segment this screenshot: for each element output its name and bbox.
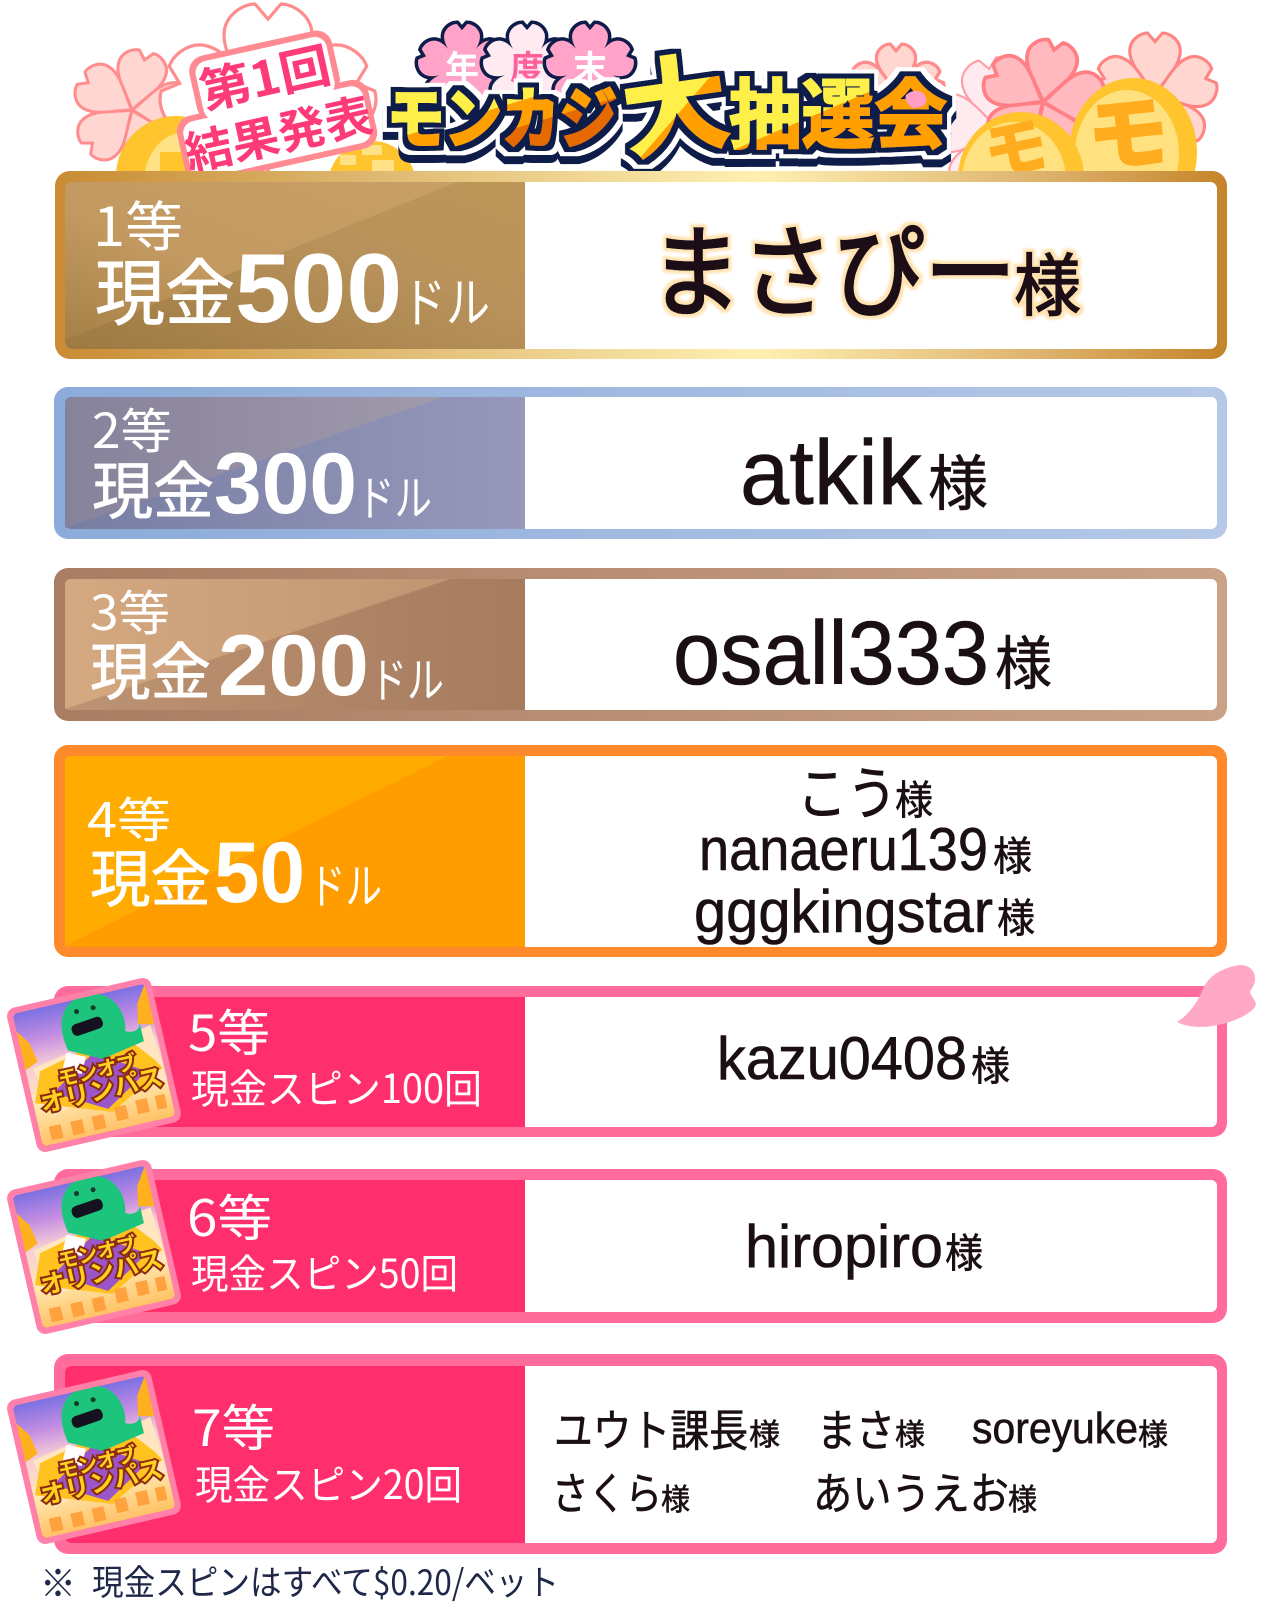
icon: gold coin with emblem large: モ: [1081, 66, 1173, 190]
icon: game thumbnail 7th prize: オリンパス: [37, 1449, 167, 1513]
icon: game thumbnail 6th prize: モンオブ: [55, 1228, 139, 1274]
prize: cash 500 dollars: ドル: [402, 259, 490, 338]
icon: fiscal year-end flower 度: [480, 20, 559, 90]
winner name: atkik: [740, 422, 923, 524]
winner names: さくら: [552, 1458, 662, 1522]
icon: left pale sakura flower: [74, 48, 178, 162]
prize: cash 200 dollars: 200: [218, 618, 369, 714]
icon: pink flower: [982, 38, 1106, 137]
icon: fiscal year-end flower 末: 末: [573, 41, 607, 90]
icon: left gold coin: [116, 116, 186, 171]
prize: cash 300 dollars: 300: [214, 436, 357, 532]
rank label: 7等: [192, 1389, 275, 1461]
winner name: osall333: [673, 604, 989, 704]
badge: first results announcement: 結果発表: [178, 79, 378, 185]
prize: 20 cash spins: 現金スピン20回: [195, 1453, 462, 1511]
icon: pale pink flower: [948, 56, 1000, 171]
winner names: こう: [797, 747, 897, 831]
prize: cash 50 dollars: [90, 825, 382, 921]
panel: 6th prize: [54, 1169, 1227, 1323]
winner names: 様: [895, 768, 933, 826]
icon: small petal on title: [905, 91, 926, 108]
panel: 4th prize: [54, 745, 1227, 957]
title: monkaji grand lottery: モンカジ: [387, 66, 617, 162]
winner name: 様: [928, 436, 988, 523]
winner name: kazu0408: [717, 1025, 967, 1092]
prize: cash 200 dollars: [90, 618, 444, 714]
winner names: 様: [993, 824, 1032, 882]
prize: 100 cash spins: 現金スピン100回: [191, 1057, 482, 1115]
rank label: 6等: [187, 1179, 272, 1251]
prize: cash 500 dollars: 500: [235, 233, 402, 343]
winner names: 様: [661, 1475, 690, 1519]
winner names: 様: [895, 1410, 925, 1454]
prize: cash 50 dollars: ドル: [309, 847, 382, 917]
icon: game thumbnail 5th prize: モンオブ: [55, 1046, 139, 1092]
winner names: ユウト課長: [554, 1395, 748, 1459]
prize: cash 500 dollars: [95, 233, 490, 343]
panel: 7th prize: [54, 1354, 1227, 1554]
prize: cash 50 dollars: 50: [214, 825, 305, 921]
title: monkaji grand lottery: [382, 48, 956, 171]
winner name: 様: [995, 617, 1052, 701]
panel: 5th prize: [54, 986, 1227, 1137]
prize: cash 300 dollars: [92, 436, 432, 532]
icon: game thumbnail 5th prize: [5, 976, 183, 1154]
icon: gold coin with emblem small: モ: [975, 93, 1054, 194]
winner names: まさ: [817, 1395, 895, 1459]
winner names: nanaeru139: [699, 816, 988, 883]
winner name: まさぴー: [650, 192, 1016, 337]
winner names: soreyuke: [972, 1404, 1138, 1453]
footnote: ※: [40, 1553, 76, 1608]
winner name: 様: [945, 1221, 983, 1279]
winner names: あいうえお: [813, 1458, 1009, 1522]
prize: cash 50 dollars: 現金: [90, 829, 211, 919]
icon: game thumbnail 6th prize: オリンパス: [37, 1239, 167, 1303]
prize: cash 200 dollars: 現金: [90, 622, 211, 712]
icon: large white sakura flower: [158, 2, 378, 171]
winner names: 様: [749, 1410, 780, 1454]
winner name: 様: [1014, 231, 1081, 330]
badge: first results announcement: 第1回: [192, 26, 336, 123]
winner names: 様: [997, 886, 1035, 944]
prize: 50 cash spins: 現金スピン50回: [191, 1242, 458, 1300]
winner name: hiropiro: [745, 1213, 943, 1280]
icon: game thumbnail 7th prize: モンオブ: [55, 1438, 139, 1484]
icon: fiscal year-end flower 年: 年: [445, 41, 479, 90]
prize: cash 200 dollars: ドル: [370, 641, 444, 711]
footnote: 現金スピンはすべて$0.20/ベット: [92, 1555, 559, 1606]
winner names: gggkingstar: [694, 878, 993, 945]
prize: cash 300 dollars: ドル: [357, 459, 432, 529]
title: monkaji grand lottery: 大: [612, 17, 736, 181]
rank label: 2等: [92, 392, 172, 462]
header banner: [54, 4, 1222, 244]
icon: gold coin with emblem small: [958, 112, 1084, 171]
icon: fiscal year-end flower 度: 度: [510, 41, 544, 90]
winner names: 様: [1138, 1410, 1168, 1454]
rank label: 1等: [93, 183, 183, 262]
icon: falling sakura petal: [1177, 965, 1256, 1027]
rank label: 3等: [90, 574, 170, 644]
icon: fiscal year-end flower 年: [414, 20, 495, 96]
prize: cash 500 dollars: 現金: [95, 235, 235, 340]
winner names: 様: [1008, 1475, 1037, 1519]
prize: cash 300 dollars: 現金: [92, 441, 214, 531]
icon: fiscal year-end flower 末: [542, 20, 638, 94]
rank label: 4等: [87, 781, 171, 851]
rank label: 5等: [188, 994, 270, 1066]
icon: coin behind title: [330, 141, 414, 171]
icon: game thumbnail 7th prize: [5, 1368, 183, 1546]
icon: game thumbnail 5th prize: オリンパス: [37, 1057, 167, 1121]
badge: first results announcement: [176, 30, 378, 171]
icon: far right pale flower: [1096, 32, 1218, 142]
title: monkaji grand lottery: 抽選会: [729, 54, 947, 164]
icon: game thumbnail 6th prize: [5, 1158, 183, 1336]
winner name: 様: [971, 1034, 1010, 1092]
winner names: [694, 747, 1035, 945]
panel: 1st prize: [55, 171, 1227, 359]
winner names: [552, 1395, 1168, 1522]
icon: right small pink flower: [851, 42, 946, 88]
panel: 3rd prize: [54, 568, 1227, 721]
panel: 2nd prize: [54, 387, 1227, 539]
icon: gold coin with emblem large: [1070, 78, 1197, 171]
